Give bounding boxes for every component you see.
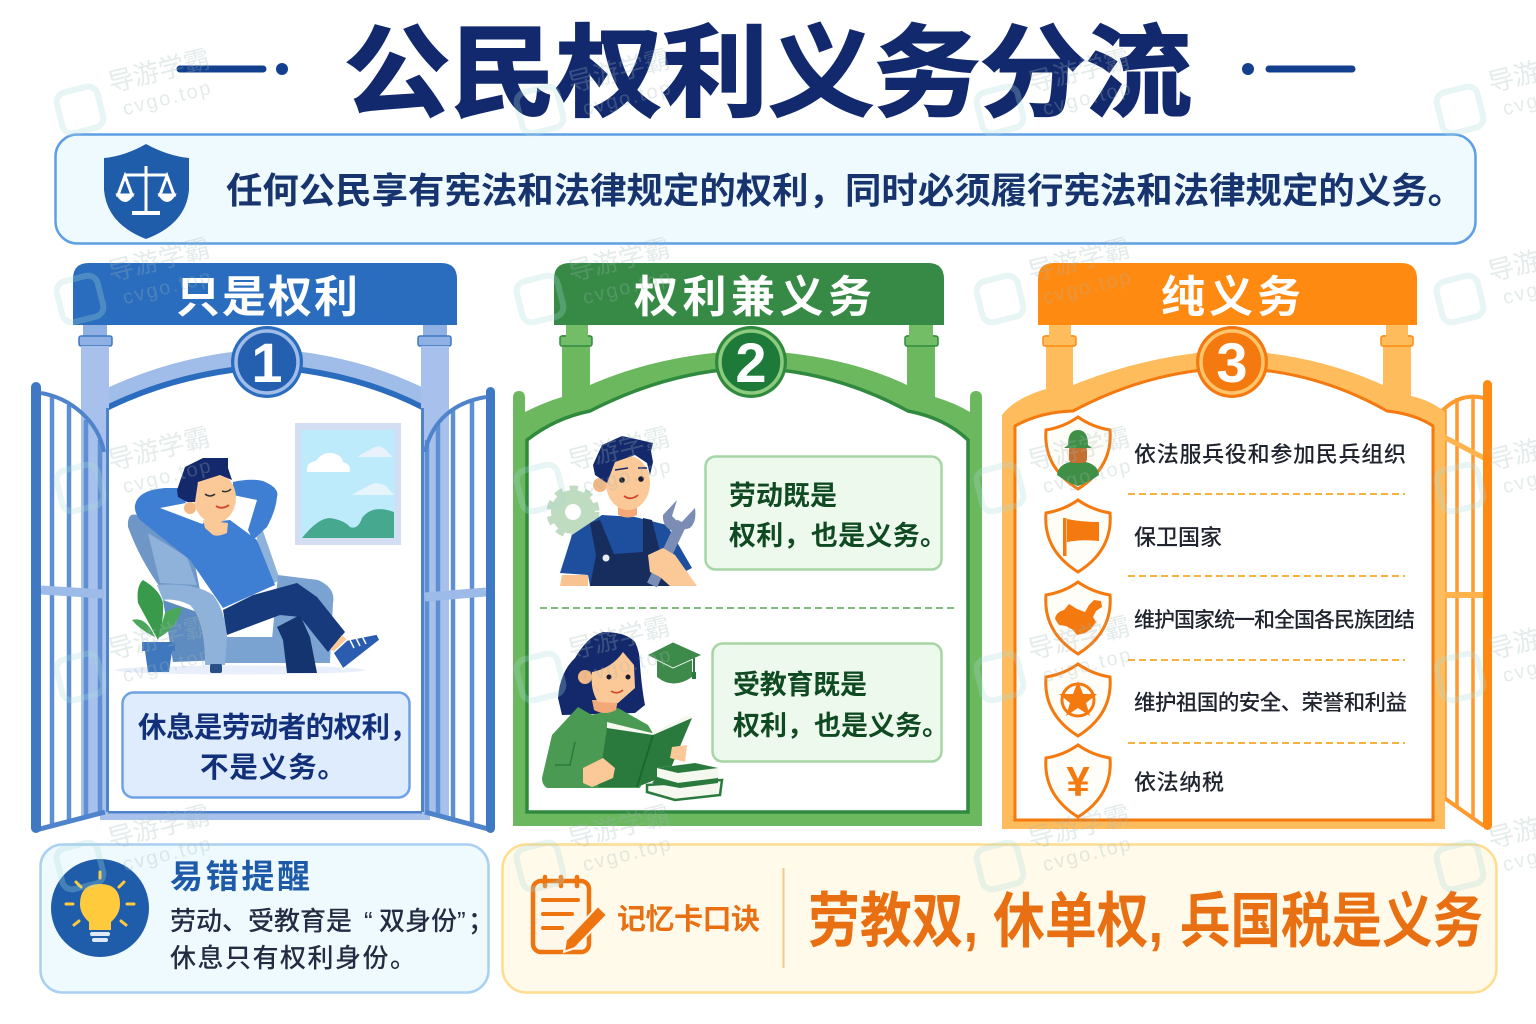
icon: graduation cap xyxy=(647,642,702,684)
duty item: national security xyxy=(1046,664,1407,736)
illustration: relaxing man in armchair xyxy=(115,458,380,674)
heading: duty only: 纯义务 xyxy=(1161,273,1301,322)
watermark pattern: 导游学霸 xyxy=(105,422,213,476)
right door xyxy=(425,387,495,833)
watermark pattern: cvgo.top xyxy=(581,266,675,309)
watermark pattern: cvgo.top xyxy=(121,644,215,687)
number badge 1 xyxy=(231,326,303,398)
icon: flag shield xyxy=(1046,500,1110,572)
callout: education: 权利，也是义务。 xyxy=(733,711,949,741)
number badge 2: 2 xyxy=(735,331,767,394)
text: principle statement: 任何公民享有宪法和法律规定的权利，同时必须履行宪法和法律规定的义务。 xyxy=(226,170,1464,211)
gate frame xyxy=(1002,325,1445,829)
icon: yen shield xyxy=(1046,745,1110,817)
watermark pattern: 导游学霸 xyxy=(565,611,673,665)
callout: education: 受教育既是 xyxy=(733,670,867,700)
callout: labour: 权利，也是义务。 xyxy=(729,521,947,551)
heading: duty only xyxy=(1038,263,1417,325)
watermark pattern: 导游学霸 xyxy=(565,44,673,98)
heading: rights only xyxy=(73,263,457,325)
watermark pattern: 导游学霸 xyxy=(1025,44,1133,98)
panel: common mistake reminder xyxy=(40,844,494,992)
title: 公民权利义务分流 xyxy=(344,18,1192,130)
number badge 2 xyxy=(715,326,787,398)
watermark pattern: cvgo.top xyxy=(121,455,215,498)
dashed divider xyxy=(1128,493,1405,495)
icon: light bulb xyxy=(51,859,149,957)
title xyxy=(180,18,1352,130)
panel: gate 1 rights only xyxy=(31,263,495,833)
icon: map shield xyxy=(1046,582,1110,654)
gate frame xyxy=(513,325,982,826)
watermark pattern: cvgo.top xyxy=(121,833,215,876)
right door xyxy=(1441,380,1492,830)
icon: stack of books xyxy=(647,763,722,800)
text: reminder body: “ xyxy=(364,906,373,936)
watermark pattern: cvgo.top xyxy=(581,455,675,498)
watermark pattern: cvgo.top xyxy=(121,266,215,309)
text: reminder body: ” xyxy=(457,906,466,936)
text: reminder body: ； xyxy=(468,906,494,936)
gate columns xyxy=(79,325,451,820)
panel: gate 3 duty only xyxy=(1002,263,1492,830)
text: mnemonic slogan xyxy=(808,888,1483,955)
watermark pattern: 导游学霸 xyxy=(1025,233,1133,287)
gate arch xyxy=(90,356,440,409)
duty item: military service xyxy=(1046,417,1406,489)
duty item: pay taxes xyxy=(1046,745,1224,817)
panel: principle banner xyxy=(56,134,1476,244)
panel: gate 2 both right and duty xyxy=(513,263,982,826)
icon: soldier shield xyxy=(1046,417,1110,489)
number badge 1: 1 xyxy=(251,331,283,394)
watermark pattern: cvgo.top xyxy=(1041,644,1135,687)
watermark pattern: cvgo.top xyxy=(581,77,675,120)
icon: star shield xyxy=(1046,664,1110,736)
watermark pattern: cvgo.top xyxy=(1041,266,1135,309)
watermark pattern: 导游学霸 xyxy=(1025,422,1133,476)
text: reminder body: 劳动、受教育是 xyxy=(170,906,352,936)
icon: notepad and pencil xyxy=(533,877,607,952)
dashed divider xyxy=(1128,575,1405,577)
icon: yen shield: ¥ xyxy=(1066,758,1090,805)
duty item: military service: 依法服兵役和参加民兵组织 xyxy=(1134,442,1406,467)
duty item: national unity: 维护国家统一和全国各民族团结 xyxy=(1134,609,1415,632)
illustration: student reading xyxy=(542,632,692,788)
callout: rest is a right: 不是义务。 xyxy=(200,752,346,784)
dashed divider xyxy=(1128,742,1405,744)
text: mnemonic slogan: 休单权, xyxy=(993,888,1163,955)
number badge 3 xyxy=(1196,326,1268,398)
illustration: worker with wrench xyxy=(550,436,697,586)
watermark pattern: 导游学霸 xyxy=(1025,800,1133,854)
watermark pattern: 导游学霸 xyxy=(105,800,213,854)
dashed divider xyxy=(1128,659,1405,661)
watermark pattern: 导游学霸 xyxy=(565,422,673,476)
callout: labour: 劳动既是 xyxy=(729,481,837,511)
window illustration xyxy=(295,423,401,545)
text: reminder body: 双身份 xyxy=(379,906,457,936)
text: mnemonic slogan: 劳教双, xyxy=(808,888,978,955)
icon: potted plant xyxy=(132,580,182,672)
watermark pattern: cvgo.top xyxy=(581,833,675,876)
watermark pattern: 导游学霸 xyxy=(565,233,673,287)
icon: shield with scales xyxy=(104,144,189,239)
heading: mnemonic card: 记忆卡口诀 xyxy=(617,903,760,936)
duty item: defend the country xyxy=(1046,500,1222,572)
text: reminder body xyxy=(170,906,494,973)
watermark pattern: 导游学霸 xyxy=(565,800,673,854)
watermark pattern: 导游学霸 xyxy=(105,233,213,287)
watermark pattern: cvgo.top xyxy=(1041,833,1135,876)
duty item: national unity xyxy=(1046,582,1415,654)
number badge 3: 3 xyxy=(1216,331,1248,394)
panel: mnemonic xyxy=(502,844,1496,992)
watermark pattern: 导游学霸 xyxy=(105,611,213,665)
watermark pattern: 导游学霸 xyxy=(1025,611,1133,665)
watermark pattern: cvgo.top xyxy=(1041,455,1135,498)
heading: rights only: 只是权利 xyxy=(176,273,358,322)
callout: labour xyxy=(706,456,947,570)
left door xyxy=(31,382,105,833)
text: reminder body: 休息只有权利身份。 xyxy=(170,943,416,973)
duty item: pay taxes: 依法纳税 xyxy=(1134,770,1224,795)
watermark pattern: 导游学霸 xyxy=(105,44,213,98)
callout: rest is a right: 休息是劳动者的权利， xyxy=(138,712,418,744)
heading: both: 权利兼义务 xyxy=(634,273,872,322)
watermark pattern: cvgo.top xyxy=(581,644,675,687)
callout: education xyxy=(712,644,949,762)
watermark pattern: cvgo.top xyxy=(121,77,215,120)
dashed divider xyxy=(540,607,955,609)
heading: both xyxy=(554,263,944,325)
callout: rest is a right xyxy=(122,692,418,798)
text: mnemonic slogan: 兵国税是义务 xyxy=(1180,888,1483,955)
duty item: national security: 维护祖国的安全、荣誉和利益 xyxy=(1134,691,1407,715)
duty item: defend the country: 保卫国家 xyxy=(1134,525,1222,550)
heading: reminder: 易错提醒 xyxy=(170,858,310,895)
watermark pattern: cvgo.top xyxy=(1041,77,1135,120)
